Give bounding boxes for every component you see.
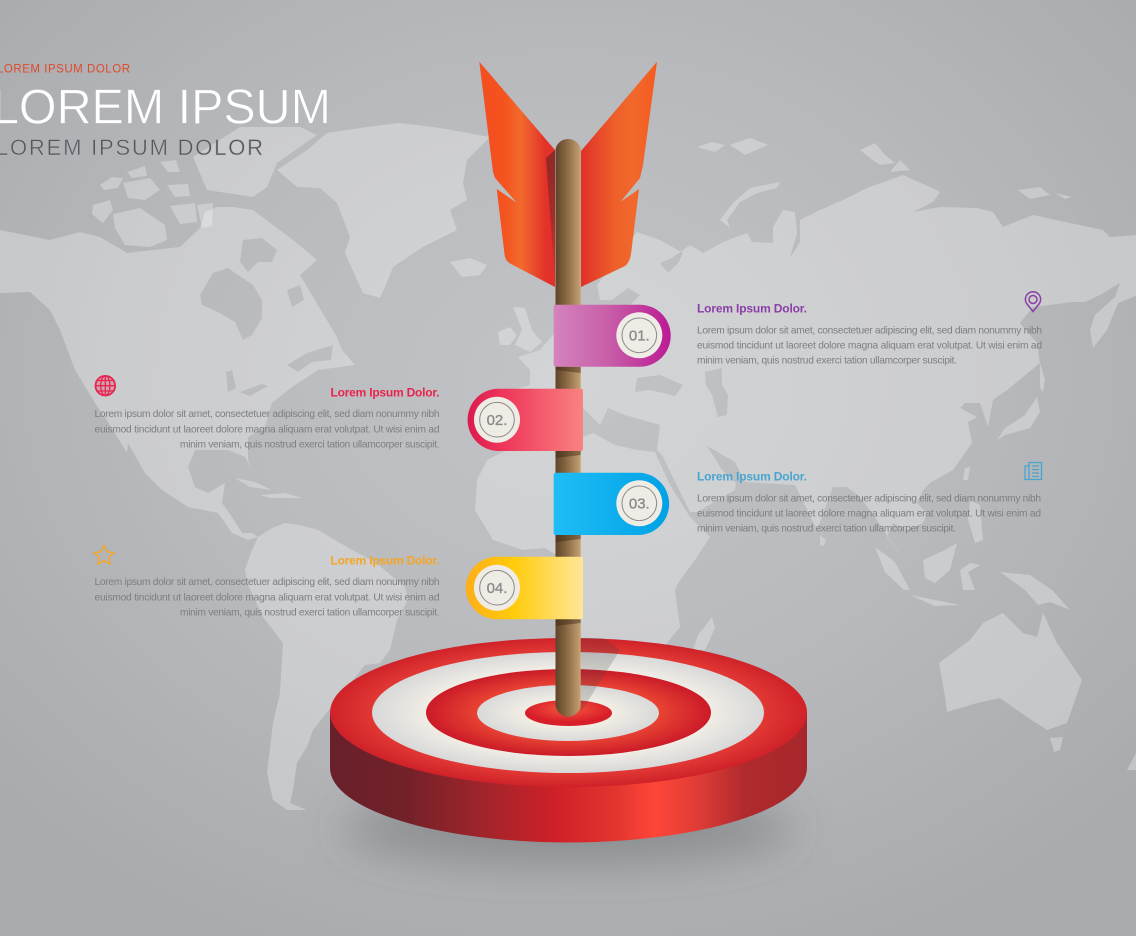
body 03: [697, 493, 1041, 535]
body 01: Lorem ipsum dolor sit amet, consectetuer adipiscing elit, sed diam nonummy nibh: [697, 325, 1042, 336]
shaft shadows under tags: [556, 367, 581, 626]
main title: LOREM IPSUM: [0, 80, 331, 134]
map: Greenland: [277, 123, 490, 298]
tag 04 ribbon: [466, 557, 583, 619]
tag 02 ribbon: [468, 389, 583, 451]
tag 02: [468, 389, 583, 451]
body 02: euismod tincidunt ut laoreet dolore magna aliquam erat volutpat. Ut wisi enim ad: [94, 424, 440, 435]
target inner white ring: [477, 685, 659, 741]
arrow cast shadow: [581, 638, 620, 712]
tag 01 ribbon: [554, 305, 671, 367]
arrow: [479, 62, 657, 717]
body 02: [94, 409, 440, 451]
body 01: euismod tincidunt ut laoreet dolore magna aliquam erat volutpat. Ut wisi enim ad: [697, 340, 1042, 351]
map: Australia: [939, 613, 1082, 752]
heading 02: Lorem Ipsum Dolor.: [330, 385, 440, 399]
body 04: minim veniam, quis nostrud exerci tation ullamcorper suscipit.: [180, 608, 440, 619]
icon: location pin: [1025, 292, 1041, 312]
heading 03: Lorem Ipsum Dolor.: [697, 469, 807, 483]
map: Arctic islands of Canada: [92, 127, 317, 247]
tag 01 badge: 01.: [629, 328, 650, 345]
body 03: Lorem ipsum dolor sit amet, consectetuer adipiscing elit, sed diam nonummy nibh: [697, 493, 1041, 504]
left feather: [479, 62, 555, 287]
target side wall: [330, 712, 807, 842]
tag 01: [554, 305, 671, 367]
map: Eurasia: [500, 175, 1136, 563]
body 01: minim veniam, quis nostrud exerci tation ullamcorper suscipit.: [697, 356, 957, 367]
right feather: [581, 62, 657, 287]
target ground shadow: [343, 790, 793, 866]
tag 04: [466, 557, 583, 619]
body 02: Lorem ipsum dolor sit amet, consectetuer adipiscing elit, sed diam nonummy nibh: [94, 409, 440, 420]
target: [330, 638, 807, 842]
body 03: euismod tincidunt ut laoreet dolore magna aliquam erat volutpat. Ut wisi enim ad: [697, 508, 1041, 519]
target inner red ring: [426, 669, 711, 756]
map: South America: [245, 523, 408, 810]
body 04: [94, 577, 440, 619]
tag 02 badge: 02.: [487, 412, 507, 429]
target outer red ring: [330, 638, 807, 787]
heading 04: Lorem Ipsum Dolor.: [330, 553, 440, 567]
map: North America: [0, 207, 355, 540]
tag 03 badge: 03.: [629, 496, 650, 513]
title block: [0, 64, 331, 160]
tag 03: [554, 473, 669, 535]
text block 04: [94, 553, 440, 619]
text block 01: [697, 301, 1042, 367]
map: Africa: [475, 433, 710, 740]
icon: document: [1025, 462, 1042, 480]
text block 02: [94, 385, 440, 451]
icon: globe: [96, 376, 115, 396]
heading 01: Lorem Ipsum Dolor.: [697, 301, 807, 315]
arrow shaft: [556, 139, 581, 717]
icon: star: [94, 546, 114, 564]
target bullseye: [525, 700, 612, 726]
left feather fold: [546, 150, 555, 283]
tag 04 badge: 04.: [487, 580, 507, 597]
target white ring: [372, 652, 764, 773]
world map: [0, 123, 1136, 810]
map: Asia-Pacific and smaller islands: [235, 138, 1136, 770]
tag 03 ribbon: [554, 473, 669, 535]
body 04: euismod tincidunt ut laoreet dolore magna aliquam erat volutpat. Ut wisi enim ad: [94, 592, 440, 603]
body 01: [697, 325, 1042, 367]
body 03: minim veniam, quis nostrud exerci tation ullamcorper suscipit.: [697, 524, 956, 535]
body 04: Lorem ipsum dolor sit amet, consectetuer adipiscing elit, sed diam nonummy nibh: [94, 577, 440, 588]
text block 03: [697, 469, 1041, 535]
body 02: minim veniam, quis nostrud exerci tation ullamcorper suscipit.: [180, 440, 440, 451]
eyebrow text: LOREM IPSUM DOLOR: [0, 64, 130, 76]
subtitle: LOREM IPSUM DOLOR: [0, 135, 263, 160]
